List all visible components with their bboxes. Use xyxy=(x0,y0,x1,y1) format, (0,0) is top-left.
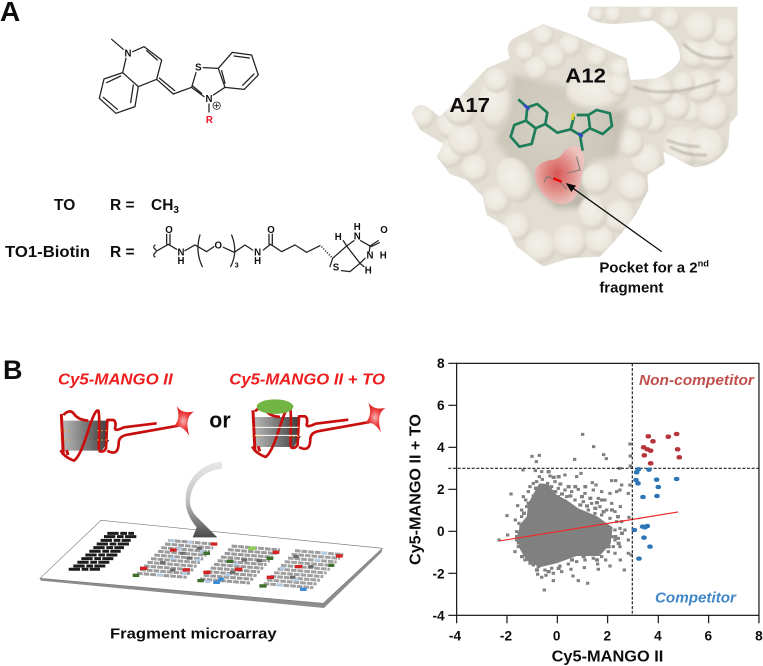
fragment pocket xyxy=(535,146,584,204)
x tick labels xyxy=(449,629,763,644)
chemical structure: biotin linker: H xyxy=(254,256,261,267)
x tick labels: 2 xyxy=(604,629,612,644)
foreground lobes xyxy=(444,56,652,231)
arrow to pocket xyxy=(566,183,662,252)
heading: B: B xyxy=(3,355,22,385)
label: pocket: fragment xyxy=(599,279,663,296)
label: TO1-Biotin substituent xyxy=(5,244,135,261)
label: Cy5-MANGO II: Cy5-MANGO II xyxy=(58,371,173,388)
chemical structure: biotin linker xyxy=(154,222,388,276)
chemical structure: biotin linker: 3 xyxy=(235,261,239,270)
chemical structure: biotin linker: N xyxy=(177,247,184,258)
label: TO substituent xyxy=(54,197,179,216)
chemical structure: thiazole orange core: R xyxy=(206,115,213,126)
TO ligand xyxy=(511,99,612,151)
label: Competitor: Competitor xyxy=(655,591,737,607)
label: Non-competitor: Non-competitor xyxy=(639,373,755,389)
x tick labels: -2 xyxy=(500,629,512,644)
y tick labels: 4 xyxy=(437,440,445,455)
chemical structure: biotin linker: O xyxy=(215,240,223,251)
surface lobes xyxy=(412,5,739,263)
spot grid 1 xyxy=(137,540,217,577)
green spots xyxy=(133,553,334,586)
chemical structure: biotin linker: O xyxy=(165,225,173,236)
dark spots xyxy=(160,548,314,577)
label: Fragment microarray: Fragment microarray xyxy=(110,626,278,642)
x tick labels: 0 xyxy=(553,629,561,644)
chemical structure: thiazole orange core xyxy=(99,39,258,126)
y tick labels: -2 xyxy=(433,567,445,582)
panel: A xyxy=(0,0,740,296)
arrow: curved grey xyxy=(186,462,222,537)
y tick labels xyxy=(433,356,445,624)
chemical structure: biotin linker: S xyxy=(333,263,340,274)
spot grid 3 xyxy=(264,551,343,588)
blue light spots xyxy=(157,541,327,585)
chemical structure: biotin linker: H xyxy=(177,256,184,267)
chemical structure: biotin linker: H xyxy=(380,251,387,262)
label: pocket: nd xyxy=(698,259,709,269)
grey data points xyxy=(497,434,633,590)
label: A17: A17 xyxy=(449,95,490,117)
strong blue spots xyxy=(213,579,307,589)
y tick labels: 6 xyxy=(437,398,445,413)
label: TO substituent: TO xyxy=(54,197,75,214)
y tick labels: 0 xyxy=(437,524,445,539)
fragment ligand xyxy=(544,157,580,189)
chemical structure: thiazole orange core: N xyxy=(205,94,212,105)
surface body xyxy=(400,0,740,270)
panel: B xyxy=(3,355,763,666)
blue points: competitors xyxy=(634,469,677,559)
molecular surface: RNA binding pocket xyxy=(400,0,740,296)
chemical structure: biotin linker: O xyxy=(380,225,388,236)
label: TO substituent: CH xyxy=(151,197,173,214)
barcode xyxy=(69,533,137,569)
label: TO substituent: R = xyxy=(110,197,135,214)
label: pocket: Pocket for a 2 xyxy=(599,259,698,276)
x tick labels: -4 xyxy=(449,629,461,644)
chemical structure: biotin linker: N xyxy=(366,251,373,262)
chemical structure: biotin linker: N xyxy=(254,247,261,258)
chemical structure: biotin linker: H xyxy=(335,232,342,243)
y tick labels: 8 xyxy=(437,356,445,371)
label: Cy5-MANGO II + TO: Cy5-MANGO II + TO xyxy=(229,371,385,388)
chemical structure: biotin linker: H xyxy=(365,265,372,276)
label: A12: A12 xyxy=(565,66,606,88)
label: TO1-Biotin substituent: TO1-Biotin xyxy=(5,244,90,261)
scatter plot xyxy=(408,356,763,666)
chemical structure: biotin linker: N xyxy=(354,231,361,242)
red points: non-competitors xyxy=(643,434,680,463)
x axis title: Cy5-MANGO II xyxy=(552,649,663,666)
chemical structure: biotin linker: O xyxy=(267,225,275,236)
red regression line xyxy=(499,512,678,541)
x tick labels: 4 xyxy=(654,629,662,644)
chemical structure: thiazole orange core: S xyxy=(195,63,202,74)
label: TO substituent: 3 xyxy=(173,205,179,216)
chemical structure: biotin linker: H xyxy=(354,222,361,233)
pocket interior xyxy=(495,75,627,208)
chemical structure: thiazole orange core: N xyxy=(124,49,131,60)
threshold lines xyxy=(448,363,759,615)
y tick labels: 2 xyxy=(437,482,445,497)
label: TO1-Biotin substituent: R = xyxy=(110,244,135,261)
x tick labels: 8 xyxy=(755,629,763,644)
y axis title: Cy5-MANGO II + TO xyxy=(408,414,425,565)
creases on right side xyxy=(633,43,733,155)
icon: Cy5-MANGO II aptamer xyxy=(60,406,194,461)
spot grid 2 xyxy=(200,546,280,583)
x tick labels: 6 xyxy=(704,629,712,644)
label: or: or xyxy=(209,407,231,432)
icon: Cy5-MANGO II + TO aptamer xyxy=(252,399,386,457)
fragment microarray slide xyxy=(40,520,382,608)
red spots xyxy=(140,544,343,577)
axes frame and ticks xyxy=(448,363,759,623)
y tick labels: -4 xyxy=(433,609,445,624)
